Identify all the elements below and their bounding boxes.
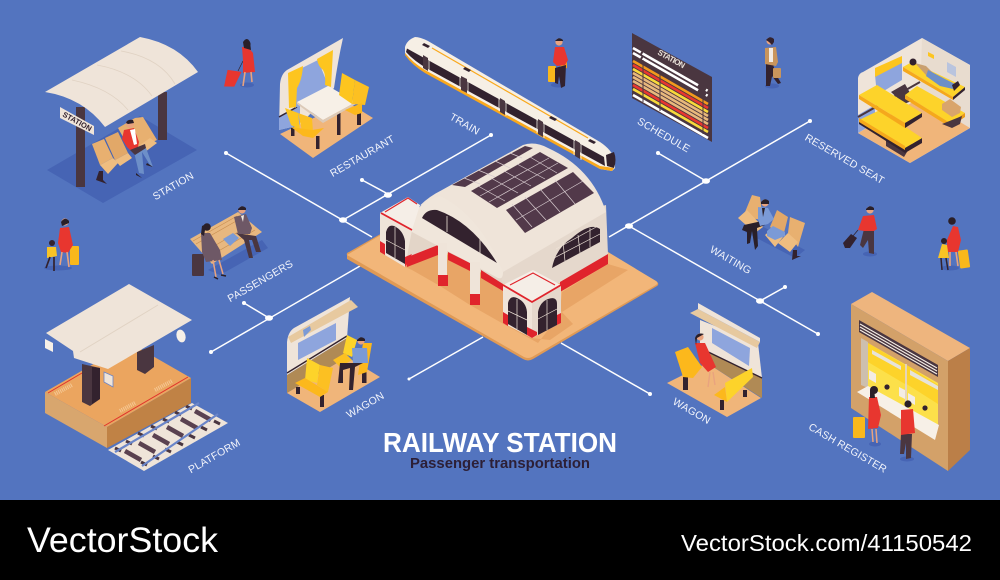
- solar panels: [452, 146, 594, 233]
- booth front: [851, 304, 948, 471]
- luggage shelf: [288, 300, 358, 343]
- illustration: reserved seat compartment: [858, 38, 970, 163]
- bench: [190, 212, 262, 264]
- window: [875, 62, 902, 95]
- lower left bunk: [859, 110, 922, 157]
- footer url: VectorStock.com/41150542: [681, 530, 972, 556]
- oval lamp: [175, 329, 187, 343]
- floor: [858, 98, 970, 163]
- red base strips: [560, 254, 608, 292]
- illustration: platform: [45, 284, 228, 471]
- legs: [792, 250, 801, 260]
- roof: [46, 284, 192, 369]
- block right face: [107, 378, 191, 448]
- window: [298, 323, 336, 360]
- table: [297, 86, 356, 135]
- curtains: [288, 66, 303, 108]
- left tower: [380, 197, 420, 267]
- block top: [45, 343, 191, 427]
- seated woman: [201, 223, 226, 279]
- label: schedule: SCHEDULE: [635, 116, 692, 155]
- wall fittings: [928, 52, 934, 59]
- back post: [158, 92, 167, 140]
- front post: [82, 364, 100, 406]
- seat one: [738, 195, 763, 233]
- seat three: [778, 217, 805, 252]
- arched front window: [422, 210, 497, 263]
- floor: [287, 357, 380, 412]
- person: man in brown coat: [765, 37, 781, 88]
- seat two: [765, 210, 788, 247]
- curved roof: [45, 37, 198, 127]
- label: wagon right: WAGON: [671, 396, 712, 427]
- label: passengers: PASSENGERS: [226, 258, 295, 305]
- label: waiting: WAITING: [708, 244, 753, 277]
- platform sign left: [45, 339, 53, 352]
- front seat: [714, 368, 753, 410]
- right lower bunk: [905, 86, 965, 128]
- mid left bunk: [859, 85, 922, 128]
- footer bar: [0, 500, 1000, 580]
- ticket windows: [861, 338, 938, 427]
- right top bunk with sleeper: [903, 58, 965, 100]
- wall: [287, 297, 350, 375]
- illustration: train: [405, 37, 616, 171]
- sleeping passenger: [915, 63, 934, 75]
- label: wagon left: WAGON: [345, 390, 386, 421]
- person: woman with red suitcase: [224, 39, 255, 89]
- seated woman: [695, 333, 716, 387]
- left seats: [285, 108, 324, 149]
- schedule rows: [633, 48, 708, 138]
- track bed: [108, 403, 228, 471]
- label: reserved seat: RESERVED SEAT: [803, 132, 887, 187]
- right tower: [503, 270, 561, 338]
- illustration: waiting seats: [738, 195, 805, 260]
- table: [891, 84, 914, 104]
- subtitle: Passenger transportation: [410, 456, 590, 472]
- counter: [857, 386, 939, 440]
- label: station: STATION: [151, 170, 196, 203]
- back post: [137, 345, 154, 374]
- suitcase: [853, 417, 865, 438]
- carriage wall: [279, 38, 343, 130]
- illustration: passengers on bench: [190, 206, 268, 279]
- luggage: [942, 99, 961, 117]
- sleeper ends: [115, 406, 220, 465]
- doors: [423, 55, 580, 159]
- blue bag: [767, 226, 785, 240]
- illustration: wagon right: [667, 303, 762, 417]
- back wall under canopy: [405, 228, 503, 285]
- lower wall: [700, 348, 762, 398]
- label: platform: PLATFORM: [186, 437, 243, 476]
- illustration: wagon left: [287, 297, 380, 412]
- central station building: [347, 144, 658, 360]
- window: [712, 328, 750, 366]
- ground shadow: [47, 116, 197, 203]
- roof vents: [422, 43, 596, 144]
- illustration: schedule board: [632, 33, 712, 142]
- edge stripes: [48, 373, 188, 426]
- seated man: [234, 206, 261, 258]
- station sign: STATION: [61, 110, 93, 133]
- luggage shelf: [690, 309, 760, 348]
- woman at counter: [868, 386, 881, 446]
- connector lines: [209, 119, 820, 396]
- board heading: STATION: [656, 48, 687, 70]
- blue bag: [223, 233, 239, 246]
- platform sign front: [104, 372, 113, 387]
- columns: [438, 243, 480, 305]
- window: [290, 60, 330, 108]
- rails: [115, 403, 218, 466]
- bench seats: [92, 117, 157, 184]
- station platform base: [347, 200, 658, 360]
- shadow: [208, 240, 268, 275]
- person: man with yellow suitcase: [548, 38, 568, 88]
- dark suitcase: [192, 254, 204, 276]
- person: man with black suitcase: [843, 206, 877, 256]
- right seats: [339, 73, 369, 125]
- front post: [76, 107, 85, 187]
- title: RAILWAY STATION: [383, 427, 617, 458]
- window band: [406, 48, 605, 166]
- blue bag: [303, 326, 311, 337]
- footer brand: VectorStock: [27, 521, 219, 560]
- block left face: [45, 392, 107, 448]
- roof stripe: [432, 48, 588, 138]
- wall: [700, 320, 762, 378]
- person: mother and child on the left: [44, 218, 79, 271]
- sign slats: [859, 320, 938, 377]
- gable window: [552, 226, 600, 268]
- man at counter: [900, 400, 915, 462]
- floor: [280, 102, 373, 158]
- roof shell: [408, 144, 606, 272]
- booth top: [851, 292, 970, 361]
- person: mother and child with yellow suitcase: [938, 217, 970, 270]
- seated man: [338, 337, 368, 390]
- sleepers: [125, 411, 211, 460]
- front seats: [295, 358, 333, 407]
- shadow: [745, 225, 805, 258]
- label: cash register: CASH REGISTER: [806, 421, 889, 476]
- back seats: [333, 335, 372, 383]
- seated man: [742, 199, 774, 250]
- seated man: [122, 120, 153, 178]
- lower wall: [287, 338, 347, 393]
- illustration: restaurant: [279, 38, 373, 158]
- board panel: [632, 33, 712, 142]
- label: restaurant: RESTAURANT: [328, 133, 397, 180]
- floor: [667, 363, 761, 417]
- illustration: cash register: [851, 292, 970, 471]
- booth side: [948, 348, 970, 471]
- label: train: TRAIN: [447, 111, 482, 138]
- nose: [606, 152, 616, 168]
- orange skirt: [405, 53, 614, 171]
- gable wall: [480, 205, 608, 284]
- train body: [405, 37, 615, 171]
- rear seat: [675, 347, 702, 390]
- illustration: station shelter: [45, 37, 198, 203]
- compartment walls: [858, 38, 970, 163]
